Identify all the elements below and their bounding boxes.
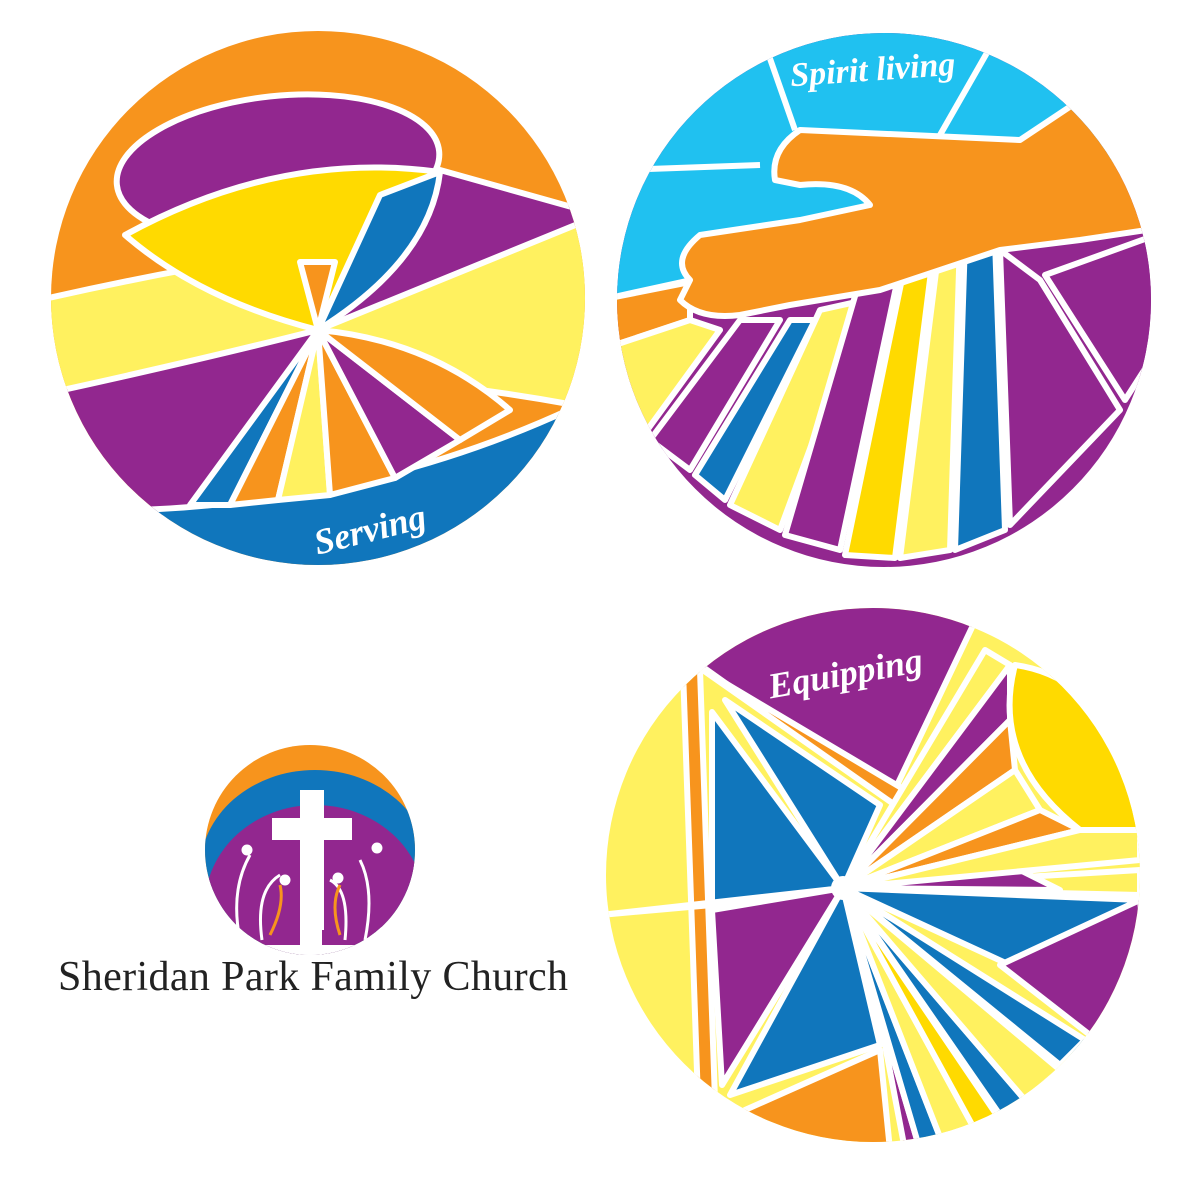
bowl [109,79,447,330]
panel: Spirit living circle [617,33,1151,567]
orange vertical strips [683,670,715,1100]
panel: Serving circle [40,20,600,580]
purple top [703,608,975,784]
label: Serving: Serving [310,496,430,563]
purple right wedge [326,167,576,328]
purple lower left [40,330,318,515]
figures [237,844,381,940]
left orange band [617,284,693,345]
blue bottom band [151,410,560,565]
panel: Equipping circle [600,600,1160,1160]
left light yellow [620,318,723,430]
title: church name: Sheridan Park Family Church [58,954,568,1000]
light yellow band [40,215,600,410]
hand [680,100,1180,316]
rays fan [190,330,510,505]
rays [650,230,1170,558]
lower rays [843,888,1085,1150]
right wedges [854,891,1139,963]
label: Spirit living: Spirit living [789,46,957,94]
label: Equipping: Equipping [764,640,926,707]
logo [205,745,415,955]
blue triangles [712,712,843,905]
cross [300,790,324,930]
upper right rays [843,650,1140,888]
trumpet [1010,665,1140,830]
cyan sky [617,33,1115,296]
